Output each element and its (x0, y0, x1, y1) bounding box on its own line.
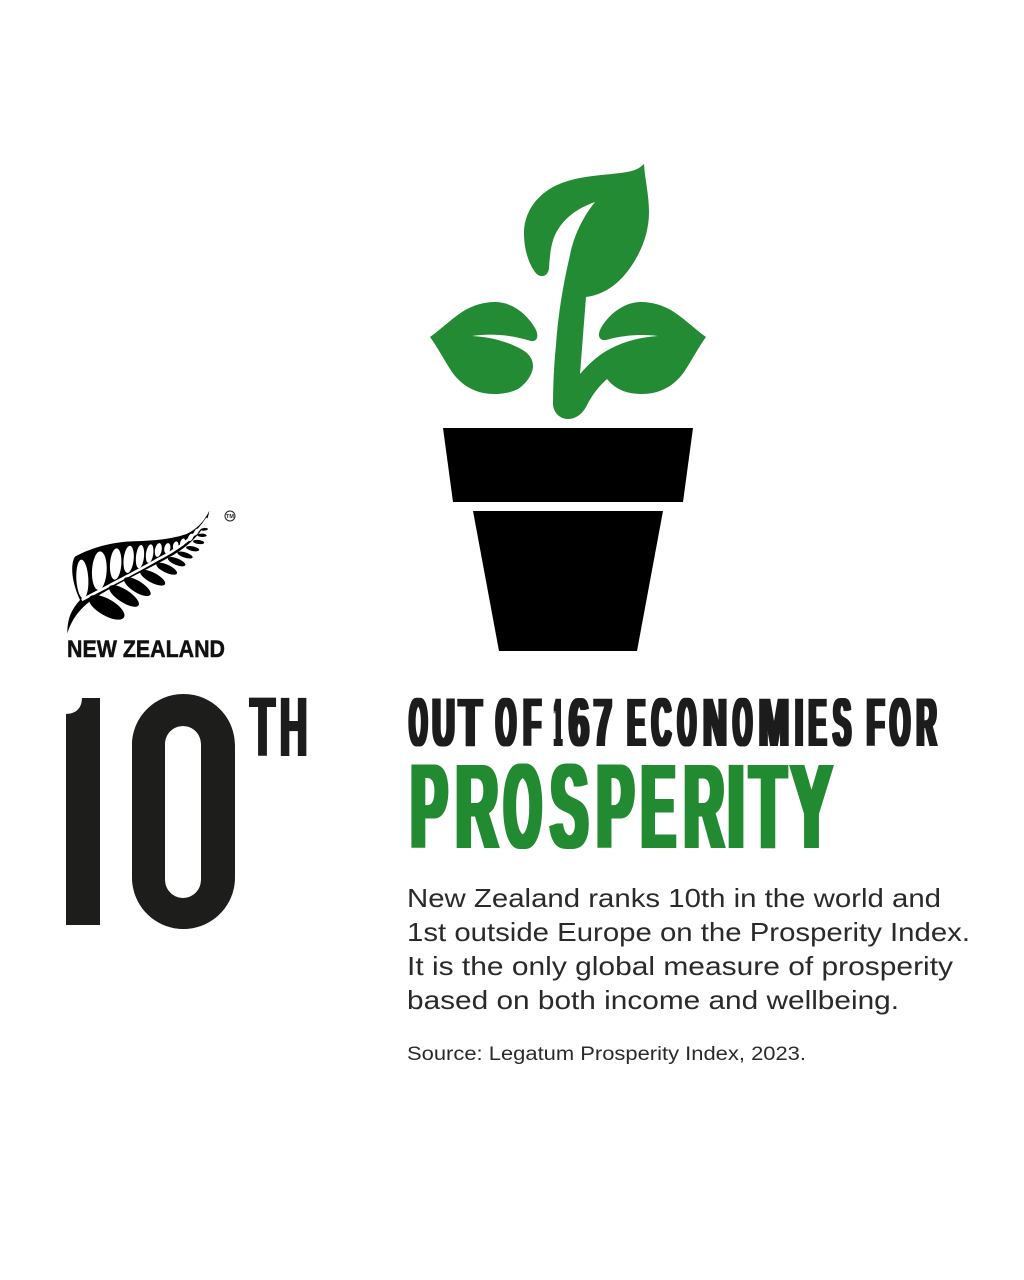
heading: prosperity: I (728, 738, 744, 874)
heading: out of 167 economies: 6 (569, 684, 589, 761)
heading: out of 167 economies: U (432, 684, 455, 761)
heading: out of 167 economies: O (496, 684, 516, 761)
text: R (917, 684, 936, 761)
heading: out of 167 economies: C (652, 684, 671, 761)
heading: prosperity: Y (791, 738, 832, 874)
heading: prosperity: S (550, 738, 588, 874)
logo wordmark: NEW ZEALAND (67, 636, 225, 663)
heading: out of 167 economies: 7 (594, 684, 612, 761)
heading: out of 167 economies: F (523, 684, 541, 761)
heading: prosperity: P (597, 738, 634, 874)
icon: pot base (473, 511, 663, 651)
big rank number (66, 694, 306, 929)
logo: New Zealand fern mark (67, 511, 235, 663)
heading: out of 167 economies: O (678, 684, 696, 761)
heading: out of 167 economies: O (733, 684, 752, 761)
heading: out of 167 economies: M (759, 684, 789, 761)
heading: prosperity: T (750, 738, 786, 874)
heading: out of 167 economies: O (890, 684, 910, 761)
digit one: 1 (0, 618, 166, 999)
heading: prosperity: O (504, 738, 541, 874)
heading: out of 167 economies: I (795, 684, 803, 761)
icon: trademark mark (225, 511, 235, 521)
digit zero: 0 (123, 627, 245, 997)
text: H (280, 680, 307, 774)
ordinal suffix: T (250, 680, 275, 774)
icon: trademark mark: TM (226, 514, 234, 520)
heading: out of 167 economies: F (867, 684, 884, 761)
heading: prosperity: R (684, 738, 724, 874)
icon: pot rim (443, 428, 693, 502)
body text: It is the only global measure of prosperity (407, 951, 953, 981)
icon: silver fern (67, 511, 209, 633)
body text: 1st outside Europe on the Prosperity Index. (407, 917, 970, 947)
heading: prosperity: E (641, 738, 675, 874)
heading: out of 167 economies: S (833, 684, 851, 761)
heading: prosperity: P (411, 738, 447, 874)
body text (407, 883, 970, 1015)
heading: out of 167 economies: T (459, 684, 482, 761)
heading: out of 167 economies: O (409, 684, 427, 761)
heading: out of 167 economies: E (627, 684, 645, 761)
heading: out of 167 economies: 1 (555, 684, 561, 761)
icon: seedling left leaf (430, 302, 537, 394)
source note: Source: Legatum Prosperity Index, 2023. (407, 1044, 806, 1065)
body text: based on both income and wellbeing. (407, 985, 899, 1015)
icon: plant in pot (430, 164, 706, 651)
icon: seedling stem and top leaf (524, 164, 706, 419)
body text: New Zealand ranks 10th in the world and (407, 883, 941, 913)
heading: out of 167 economies: N (703, 684, 727, 761)
heading: out of 167 economies: E (809, 684, 826, 761)
heading: prosperity: R (456, 738, 498, 874)
